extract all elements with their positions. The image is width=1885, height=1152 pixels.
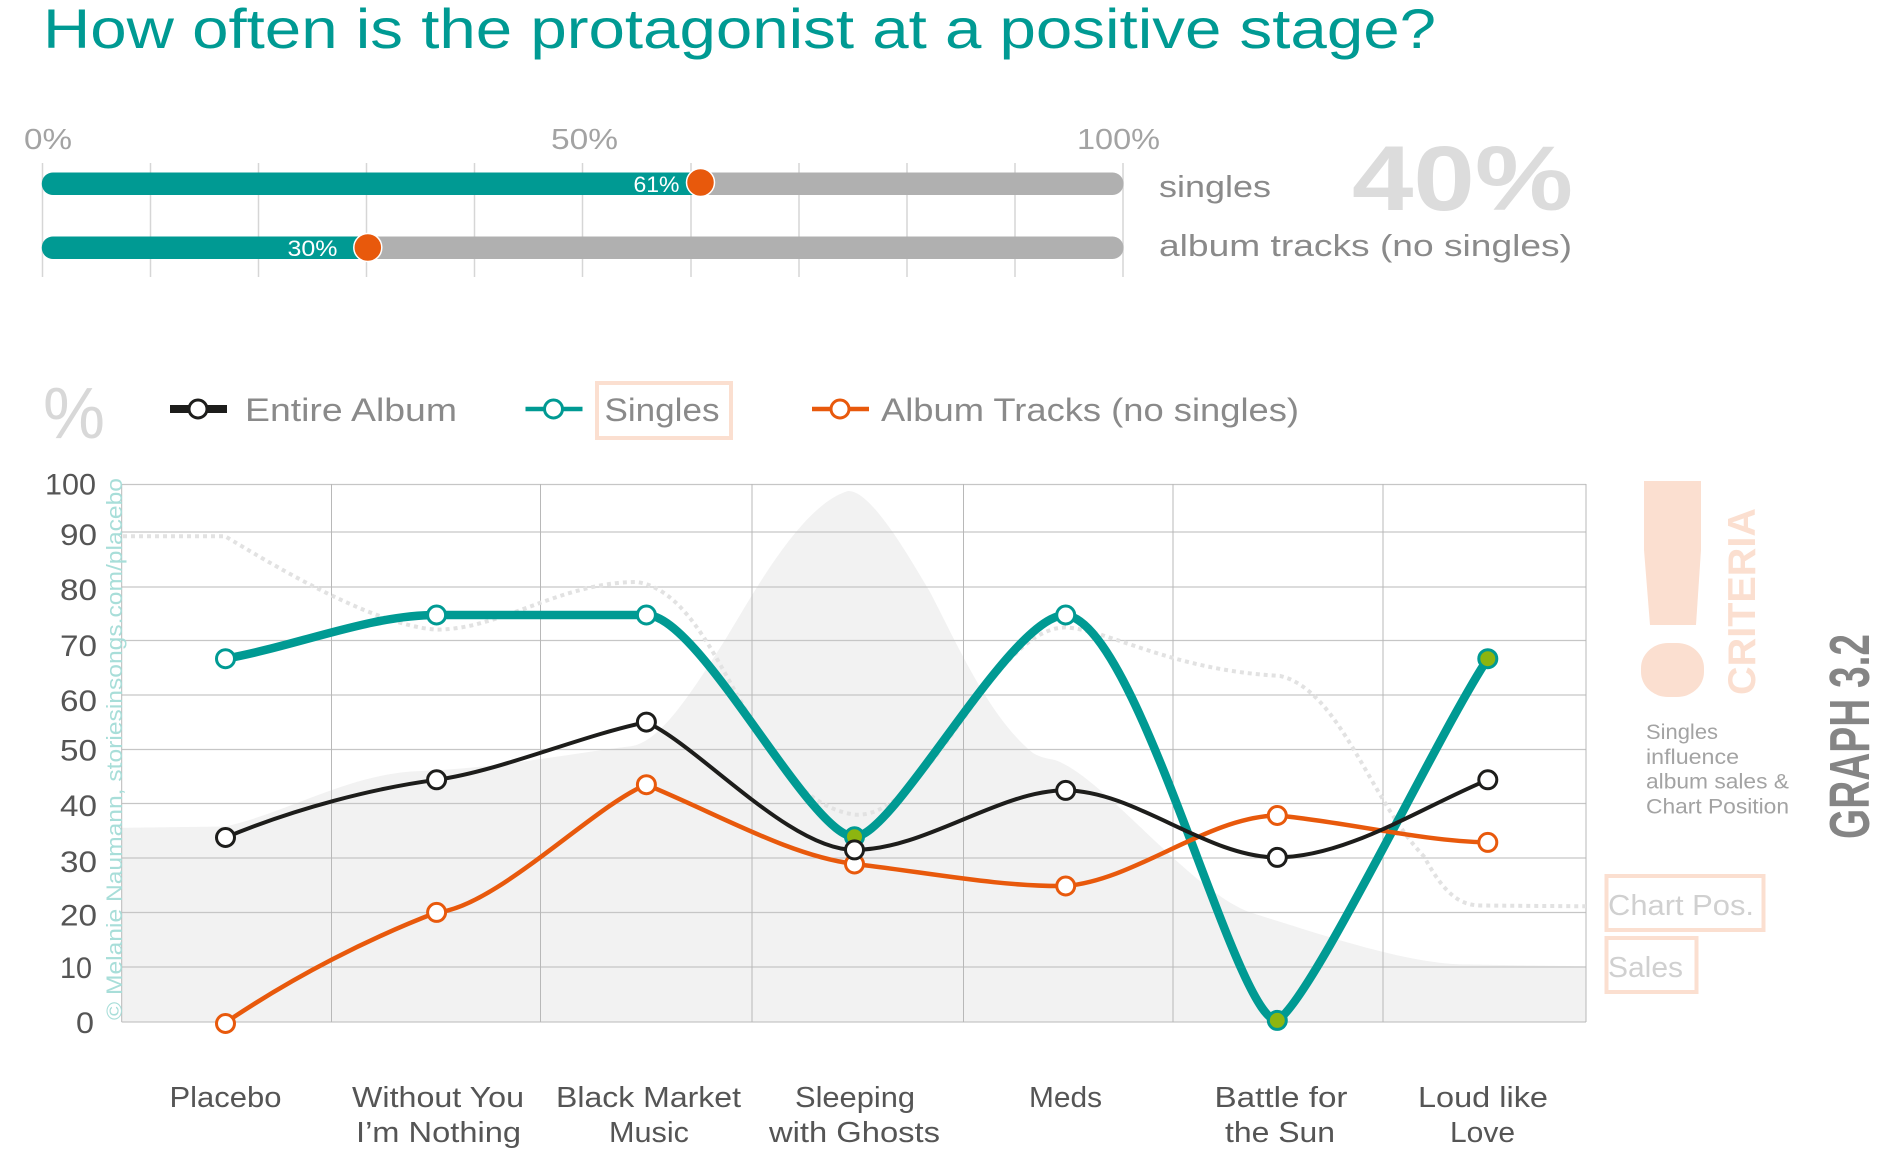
progress scale labels: 50% xyxy=(551,124,618,156)
criterion box: chart position xyxy=(1606,876,1764,930)
x axis album labels: Loud like xyxy=(1418,1082,1548,1114)
y axis labels: 70 xyxy=(60,630,97,663)
chart: line chart by album xyxy=(45,468,1586,1149)
x axis album labels: Black Market xyxy=(556,1082,741,1114)
y axis labels: 10 xyxy=(60,952,92,985)
sales area xyxy=(122,491,1586,1022)
criteria description: Singles xyxy=(1646,720,1718,744)
panel: positive stage progress bars xyxy=(24,124,1573,277)
x axis album labels xyxy=(170,1082,1548,1149)
icon: exclamation mark xyxy=(1641,481,1704,697)
legend: entire album: Entire Album xyxy=(245,392,457,428)
y axis labels: 80 xyxy=(60,574,97,607)
criteria description xyxy=(1646,720,1789,818)
progress scale labels xyxy=(24,124,1160,156)
legend: album tracks: Album Tracks (no singles) xyxy=(881,392,1299,428)
y axis labels: 30 xyxy=(60,846,97,879)
series: album tracks xyxy=(216,776,1497,1032)
bar: album tracks 30% xyxy=(42,234,1124,262)
copyright watermark: © Melanie Naumann, storiesinsongs.com/placebo xyxy=(102,478,127,1020)
x axis album labels: with Ghosts xyxy=(768,1117,940,1149)
criteria description: influence xyxy=(1646,745,1739,769)
y axis labels: 90 xyxy=(60,519,97,552)
x axis album labels: Meds xyxy=(1029,1082,1102,1114)
x axis album labels: the Sun xyxy=(1225,1117,1335,1149)
bar label: singles: singles xyxy=(1159,169,1271,204)
x axis album labels: I’m Nothing xyxy=(356,1117,521,1149)
chart position dotted line xyxy=(123,536,1586,906)
x axis album labels: Without You xyxy=(352,1082,524,1114)
x axis album labels: Sleeping xyxy=(795,1082,915,1114)
criteria description: album sales & xyxy=(1646,770,1789,794)
series: singles xyxy=(216,606,1497,1029)
series: entire album xyxy=(216,713,1497,866)
y axis labels xyxy=(45,468,97,1040)
y axis labels: 50 xyxy=(60,734,97,768)
y axis labels: 20 xyxy=(60,900,97,932)
criterion box: chart position: Chart Pos. xyxy=(1608,890,1754,922)
bar label: album tracks: album tracks (no singles) xyxy=(1159,228,1572,263)
grid lines xyxy=(122,484,1586,1022)
criterion box: sales xyxy=(1606,938,1696,992)
graph number label: GRAPH 3.2 xyxy=(1818,634,1882,839)
bar: singles 61% xyxy=(42,168,1124,197)
legend: entire album xyxy=(170,392,457,428)
y axis labels: 40 xyxy=(60,790,97,823)
x axis album labels: Music xyxy=(609,1117,689,1149)
y axis labels: 60 xyxy=(60,685,97,718)
criterion box: sales: Sales xyxy=(1608,952,1683,984)
legend xyxy=(170,383,1299,438)
progress scale labels: 100% xyxy=(1077,124,1160,156)
bar: album tracks 30%: 30% xyxy=(288,236,338,261)
bar: singles 61%: 61% xyxy=(634,172,680,197)
x axis album labels: Love xyxy=(1450,1117,1515,1149)
criteria description: Chart Position xyxy=(1646,794,1789,818)
y axis labels: 100 xyxy=(45,468,96,502)
legend: singles xyxy=(526,383,731,438)
x axis album labels: Battle for xyxy=(1214,1082,1348,1114)
progress scale labels: 0% xyxy=(24,124,72,156)
legend: singles: Singles xyxy=(604,392,720,428)
y axis labels: 0 xyxy=(76,1007,94,1040)
big stat: 40%: 40% xyxy=(1352,128,1573,230)
criteria heading: CRITERIA xyxy=(1721,508,1764,695)
axis unit: percent sign: % xyxy=(43,374,105,454)
x axis album labels: Placebo xyxy=(170,1082,282,1114)
